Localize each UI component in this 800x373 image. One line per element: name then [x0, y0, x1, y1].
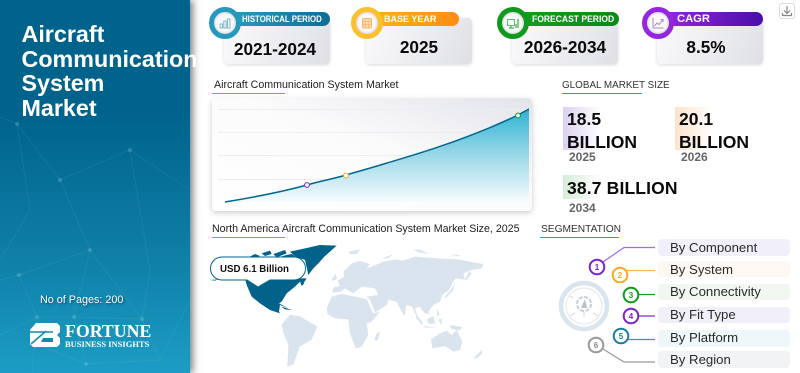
title: Market [22, 95, 97, 121]
label [367, 12, 459, 26]
segment: By Platform [658, 330, 790, 347]
heading: global market size: GLOBAL MARKET SIZE [562, 80, 670, 91]
icon: download [779, 3, 795, 19]
icon: forecast [497, 7, 529, 39]
heading: market chart: Aircraft Communication System Market [214, 79, 398, 91]
north america highlight [210, 245, 337, 313]
chart: market growth curve [210, 98, 534, 216]
year: 2026 [681, 150, 708, 164]
label: HISTORICAL PERIOD [242, 14, 322, 24]
metric: 2026 [675, 107, 749, 164]
title: System [22, 70, 104, 96]
heading: north america: North America Aircraft Communication System Market Size, 2025 [212, 223, 520, 235]
value: 20.1 [679, 108, 713, 128]
highlight [563, 107, 601, 150]
segment: By Region: By Region [670, 352, 731, 367]
metric: 2025 [563, 107, 637, 164]
stat: base year [351, 7, 473, 66]
segmentation diagram [558, 246, 655, 363]
hub icon [561, 283, 607, 329]
value: BILLION [567, 132, 637, 152]
year: 2025 [569, 150, 596, 164]
logo [30, 321, 151, 349]
value: 8.5% [686, 37, 726, 57]
metric: 2034 [563, 175, 678, 215]
label [513, 12, 619, 26]
segment: By Connectivity: By Connectivity [670, 284, 761, 299]
value: 38.7 BILLION [567, 178, 678, 198]
label [657, 12, 763, 26]
segment: By Region [658, 351, 790, 368]
heading: segmentation: SEGMENTATION [541, 224, 621, 235]
segment: By Fit Type [658, 307, 790, 323]
numbered nodes: 1 [595, 263, 600, 272]
card [657, 18, 763, 64]
icon: calendar [351, 7, 383, 39]
segment: By Component [658, 239, 790, 256]
year: 2034 [569, 201, 596, 215]
page count: No of Pages: 200 [40, 294, 123, 306]
segment: By Connectivity [658, 284, 790, 300]
numbered nodes [589, 260, 638, 352]
title: Communication [22, 46, 198, 72]
world map [210, 245, 484, 366]
highlight [563, 175, 601, 199]
title [22, 21, 198, 121]
label: CAGR [677, 13, 710, 25]
card [224, 18, 330, 64]
value: 2021-2024 [234, 39, 316, 59]
value: 18.5 [567, 108, 601, 128]
panel: sidebar [0, 0, 190, 373]
value: BILLION [679, 132, 749, 152]
numbered nodes: 6 [594, 341, 599, 350]
logo tagline: BUSINESS INSIGHTS [65, 339, 149, 349]
value [567, 108, 637, 152]
value [679, 108, 749, 152]
stat: CAGR [642, 7, 764, 66]
value: 2026-2034 [524, 37, 606, 57]
segment: By Component: By Component [670, 240, 757, 255]
segment: By Platform: By Platform [670, 330, 738, 345]
icon: logo mark [30, 323, 60, 347]
stat: forecast period [497, 7, 619, 66]
stat: historical period [209, 7, 331, 66]
numbered nodes: 3 [629, 291, 634, 300]
icon: growth [642, 7, 674, 39]
card [366, 18, 472, 64]
segment: By System [658, 261, 790, 277]
numbered nodes: 2 [618, 271, 623, 280]
label: BASE YEAR [384, 14, 436, 24]
highlight [675, 107, 713, 150]
label [225, 12, 330, 26]
title: Aircraft [22, 21, 104, 47]
card [512, 18, 618, 64]
callout: USD 6.1 Billion: USD 6.1 Billion [220, 264, 289, 275]
logo wordmark: FORTUNE [65, 321, 151, 341]
value: 2025 [400, 37, 438, 57]
icon: bar chart [209, 7, 241, 39]
label: FORECAST PERIOD [532, 14, 614, 24]
numbered nodes: 4 [629, 312, 634, 321]
callout: USD 6.1 Billion [210, 256, 306, 286]
segment: By System: By System [670, 262, 733, 277]
segment: By Fit Type: By Fit Type [670, 307, 736, 322]
numbered nodes: 5 [619, 332, 624, 341]
